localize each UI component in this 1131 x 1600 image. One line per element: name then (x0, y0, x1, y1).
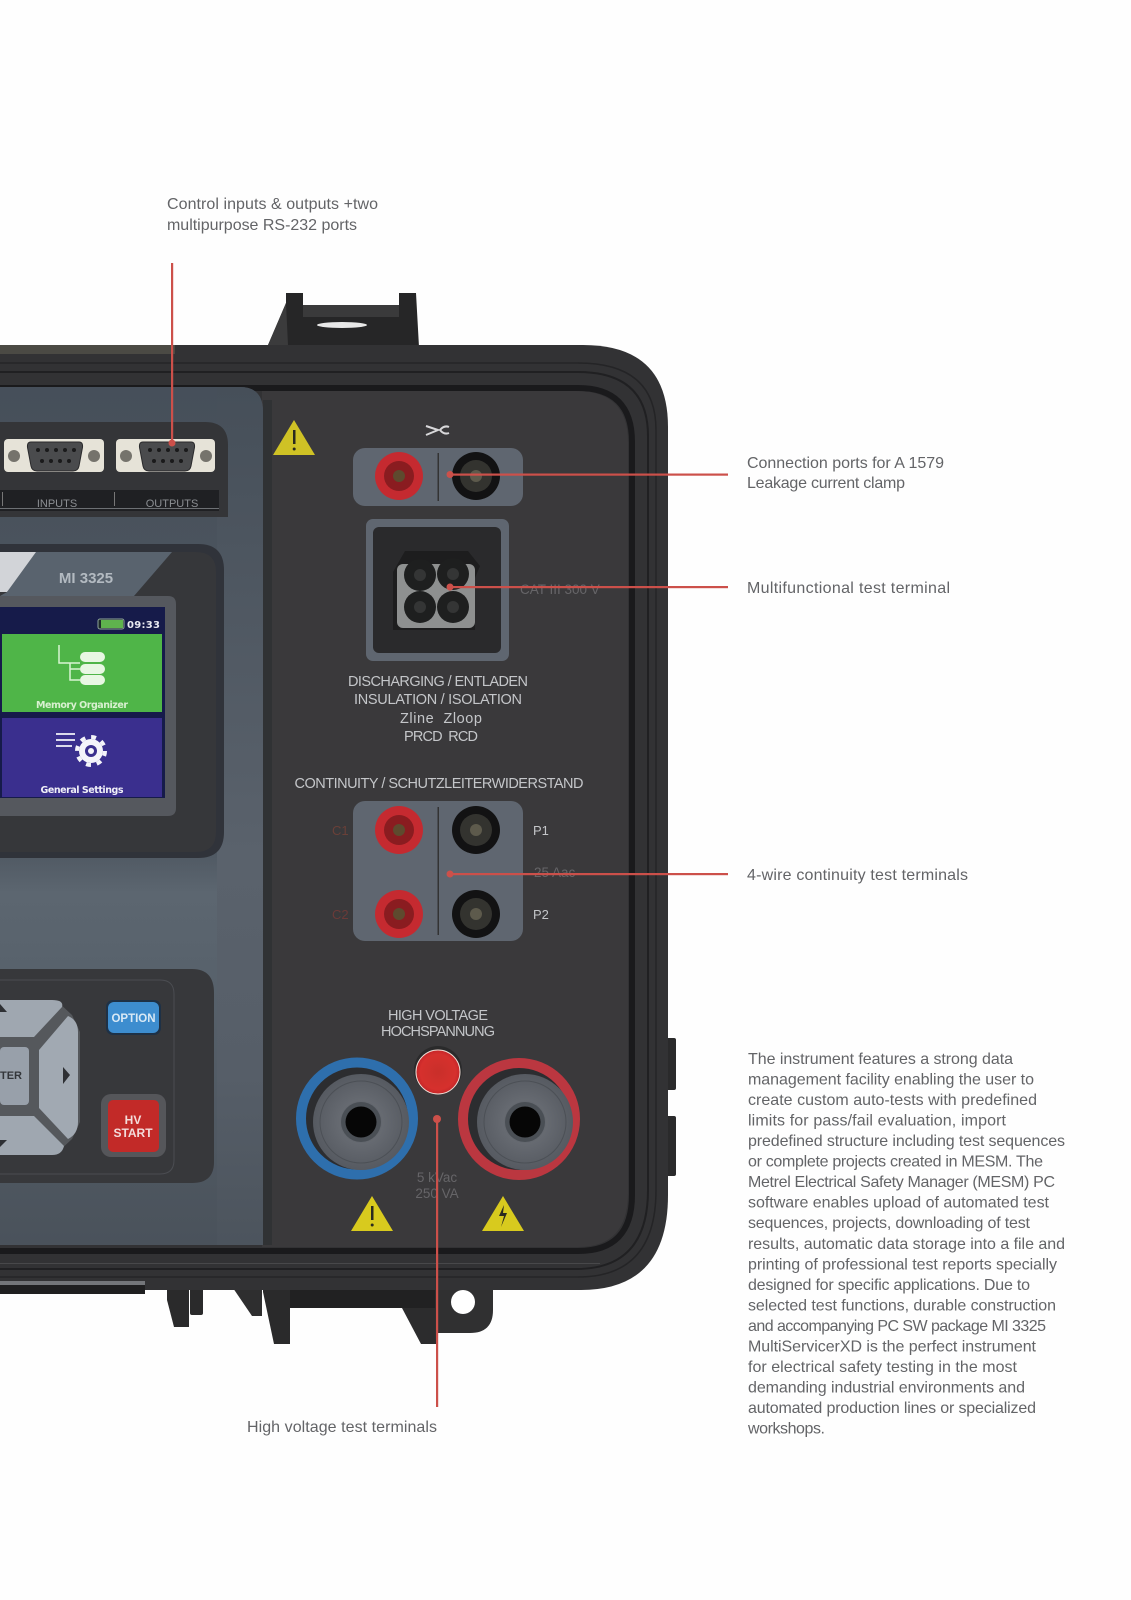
high voltage indicator lamp (414, 1046, 462, 1094)
body paragraph: software enables upload of automated test (748, 1195, 1050, 1212)
carrying handle (268, 293, 419, 347)
body paragraph: predefined structure including test sequences (748, 1133, 1065, 1150)
multifunctional terminal (366, 519, 509, 661)
model name: MI 3325 (59, 570, 113, 587)
terminal function labels (348, 674, 528, 745)
body paragraph: or complete projects created in MESM. The (748, 1154, 1043, 1171)
general settings tile: General Settings (40, 785, 124, 796)
high voltage heading: HOCHSPANNUNG (381, 1024, 495, 1040)
voltage rating: 5 kVac (417, 1170, 457, 1185)
option button (106, 1000, 161, 1035)
caption: leakage clamp: Leakage current clamp (747, 475, 905, 492)
terminal function labels: PRCD RCD (404, 729, 478, 745)
caption: continuity terminals: 4-wire continuity test terminals (747, 867, 968, 884)
terminal function labels: DISCHARGING / ENTLADEN (348, 674, 528, 690)
continuity heading: CONTINUITY / SCHUTZLEITERWIDERSTAND (294, 776, 584, 792)
bottom feet and mounting ear (167, 1285, 493, 1344)
instrument photo (0, 293, 676, 1344)
caption: leakage clamp: Connection ports for A 1579 (747, 455, 944, 472)
instrument face (0, 387, 263, 1245)
port labels: INPUTS (37, 498, 77, 510)
keypad panel (0, 969, 214, 1183)
warning triangle high voltage (482, 1196, 524, 1231)
terminal panel (262, 391, 628, 1247)
continuity terminals (353, 801, 523, 941)
option button: OPTION (111, 1013, 156, 1025)
body paragraph: management facility enabling the user to (748, 1072, 1034, 1088)
body paragraph: results, automatic data storage into a file and (748, 1236, 1065, 1253)
display bezel (0, 544, 224, 858)
terminal letters: P2 (533, 907, 549, 922)
direction pad (0, 1000, 80, 1155)
warning triangle left (351, 1196, 393, 1231)
body paragraph: workshops. (747, 1420, 825, 1438)
caption: control inputs: Control inputs & outputs +two (167, 196, 378, 213)
body paragraph: limits for pass/fail evaluation, import (748, 1113, 1007, 1130)
connector: inputs RS-232 (4, 439, 104, 472)
body paragraph: automated production lines or specialized (748, 1400, 1036, 1417)
terminal function labels: INSULATION / ISOLATION (354, 692, 522, 708)
terminal letters (332, 823, 576, 922)
body paragraph: sequences, projects, downloading of test (748, 1215, 1031, 1232)
outer case (0, 345, 668, 1290)
direction pad: TER (0, 1070, 22, 1082)
icon: clamp symbol (426, 426, 449, 435)
port labels (0, 490, 219, 511)
terminal letters: 25 Aac (534, 865, 576, 880)
body paragraph: demanding industrial environments and (748, 1380, 1025, 1396)
leakage clamp terminals (353, 448, 523, 506)
connector strip (0, 422, 228, 517)
terminal letters: P1 (533, 823, 549, 838)
terminal function labels: Zline Zloop (400, 711, 482, 727)
terminal letters: C1 (332, 823, 349, 838)
port labels: OUTPUTS (146, 498, 198, 510)
body paragraph: The instrument features a strong data (748, 1051, 1013, 1068)
caption: control inputs (167, 196, 378, 234)
pointer: high voltage terminals (433, 1115, 441, 1407)
touch screen (0, 596, 176, 816)
caption: high voltage terminals: High voltage test terminals (247, 1419, 437, 1436)
body paragraph: and accompanying PC SW package MI 3325 (748, 1318, 1046, 1335)
body paragraph: MultiServicerXD is the perfect instrument (748, 1338, 1037, 1355)
pointer lines (168, 263, 728, 1407)
CAT rating text: CAT III 300 V (520, 582, 600, 597)
body paragraph: for electrical safety testing in the most (748, 1359, 1018, 1376)
HV start button (101, 1094, 166, 1157)
memory organizer tile: Memory Organizer (36, 700, 128, 711)
right side latches (650, 1038, 676, 1176)
body paragraph: create custom auto-tests with predefined (748, 1092, 1037, 1109)
high voltage terminals (301, 1062, 575, 1175)
pointer: multifunctional terminal (446, 584, 728, 590)
warning triangle top (273, 420, 315, 455)
general settings tile (2, 718, 162, 797)
body paragraph: designed for specific applications. Due to (748, 1277, 1030, 1294)
connector: outputs RS-232 (116, 439, 215, 472)
memory organizer tile (2, 634, 162, 712)
body paragraph: Metrel Electrical Safety Manager (MESM) PC (748, 1174, 1055, 1191)
HV start button: HV (125, 1113, 141, 1127)
body paragraph: printing of professional test reports specially (748, 1256, 1057, 1273)
pointer: control ports (168, 263, 176, 446)
status bar: 09:33 (127, 620, 160, 631)
body paragraph: selected test functions, durable construction (748, 1297, 1056, 1314)
caption: control inputs: multipurpose RS-232 ports (167, 217, 357, 234)
caption: leakage clamp (747, 455, 944, 492)
body paragraph (747, 1051, 1065, 1438)
status bar (98, 619, 160, 631)
high voltage heading: HIGH VOLTAGE (388, 1008, 488, 1024)
caption: multifunctional terminal: Multifunctional test terminal (747, 580, 950, 597)
pointer: continuity terminals (446, 870, 728, 878)
terminal letters: C2 (332, 907, 349, 922)
voltage rating (415, 1170, 459, 1201)
HV start button: START (113, 1126, 153, 1140)
voltage rating: 250 VA (415, 1186, 459, 1201)
high voltage heading (381, 1008, 495, 1040)
pointer: clamp port (446, 471, 728, 478)
